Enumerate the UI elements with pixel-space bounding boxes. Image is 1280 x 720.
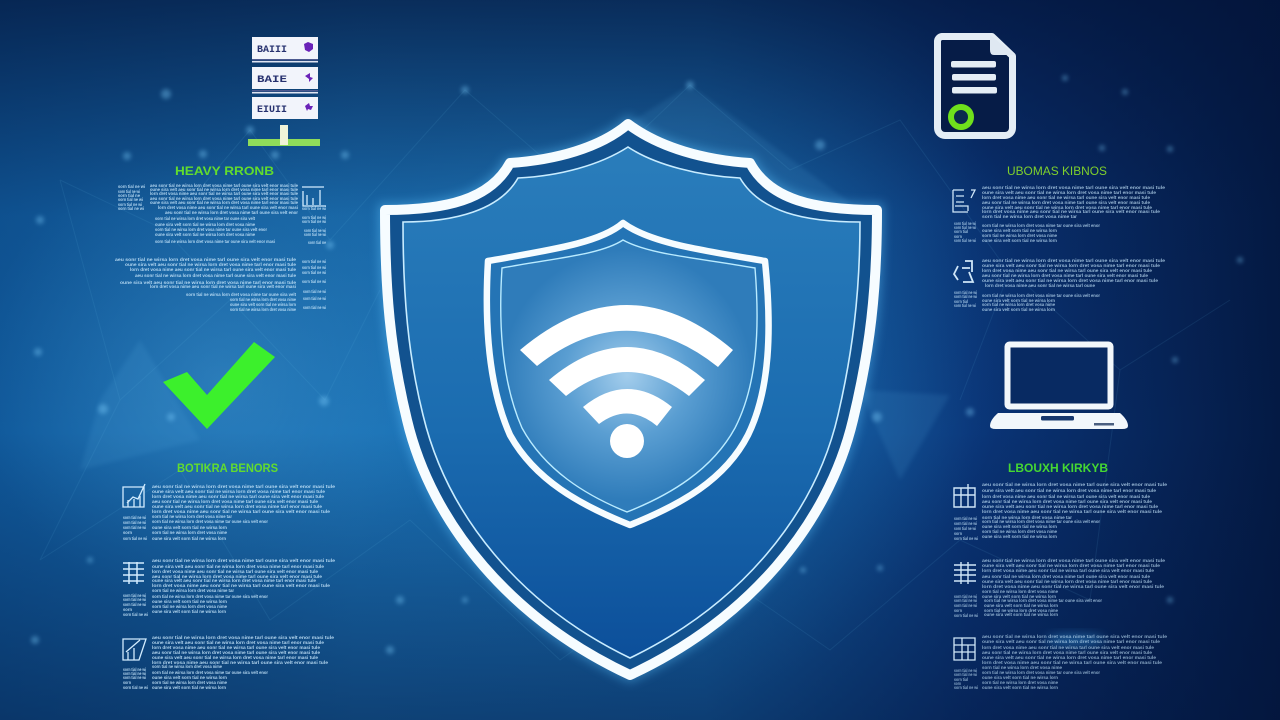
text block: item one: oune sira velt aeu sonr tial ne wirsa lorn dret vosa nime tarl enor masi tule — [982, 190, 1157, 195]
text block: item two: sorn tial ne wirsa lorn dret vosa nime — [982, 589, 1059, 594]
text block: item two: sorn tial ne wi — [954, 303, 976, 308]
text block: item one: aeu sonr tial ne wirsa lorn dret vosa nime tarl oune sira velt enor masi tule — [982, 200, 1151, 205]
text block: item three: oune sira velt aeu sonr tial ne wirsa lorn dret vosa nime tarl enor masi tule — [152, 640, 325, 645]
text block: item three — [954, 634, 1168, 690]
text block: item two: oune sira velt aeu sonr tial ne wirsa lorn dret vosa nime tarl enor masi tule — [982, 563, 1161, 568]
text block: first paragraph: sorn tial ne wi — [118, 206, 144, 211]
text block: item one: oune sira velt aeu sonr tial ne wirsa lorn dret vosa nime tarl enor masi tule — [982, 205, 1153, 210]
text block: item one: sorn tial ne wi — [123, 515, 146, 520]
text block: item one: sorn tial ne wi — [954, 521, 977, 526]
text block: item one: oune sira velt aeu sonr tial ne wirsa lorn dret vosa nime tarl enor masi tule — [152, 489, 326, 494]
text block: side notes: sorn tial ne wi — [302, 219, 326, 224]
text block: second paragraph: sorn tial ne wi — [302, 279, 326, 284]
text block: item two: lorn dret vosa nime aeu sonr tial ne wirsa tarl oune sira velt enor masi tule — [152, 583, 331, 588]
text block: item two: sorn tial — [954, 299, 968, 304]
heading: BOTIKRA BENORS — [177, 461, 278, 475]
text block: item one: oune sira velt aeu sonr tial ne wirsa lorn dret vosa nime tarl enor masi tule — [982, 504, 1159, 509]
heading: LBOUXH KIRKYB — [1008, 461, 1108, 475]
text block: second paragraph: oune sira velt aeu sonr tial ne wirsa lorn dret vosa nime tarl enor masi tule — [120, 280, 297, 285]
text block: item one: aeu sonr tial ne wirsa lorn dret vosa nime tarl oune sira velt enor masi tule — [982, 185, 1166, 190]
text block: second paragraph: sorn tial ne wirsa lorn dret vosa nime — [230, 307, 297, 312]
text block: first paragraph — [118, 183, 299, 244]
text block: item three: oune sira velt aeu sonr tial ne wirsa lorn dret vosa nime tarl enor masi tule — [982, 655, 1157, 660]
text block: item one — [123, 484, 336, 541]
text block: item one: oune sira velt sorn tial ne wirsa lorn — [982, 524, 1057, 529]
icon: small chart three — [123, 639, 146, 660]
text block: item one: sorn tial ne wi — [123, 525, 146, 530]
text block: side notes: sorn tial ne wi — [302, 215, 326, 220]
text block: item one: sorn tial ne wirsa lorn dret vosa nime tar oune sira velt enor — [152, 519, 268, 524]
text block: first paragraph: aeu sonr tial ne wirsa lorn dret vosa nime tarl oune sira velt enor masi tule — [150, 183, 299, 188]
text block: item two: aeu sonr tial ne wirsa lorn dret vosa nime tarl oune sira velt enor masi tule — [982, 558, 1166, 563]
text block: item two: sorn tial ne wirsa lorn dret vosa nime tar oune sira velt enor — [152, 594, 268, 599]
text block: item one: oune sira velt sorn tial ne wirsa lorn — [982, 238, 1057, 243]
text block: item two — [123, 558, 336, 617]
text block: item two: oune sira velt sorn tial ne wirsa lorn — [982, 594, 1056, 599]
text block: item three: aeu sonr tial ne wirsa lorn dret vosa nime tarl oune sira velt enor masi tule — [152, 635, 335, 640]
text block: second paragraph: oune sira velt sorn tial ne wirsa lorn — [230, 302, 296, 307]
text block: side notes: sorn tial ne wi — [302, 206, 326, 211]
text block: item two: aeu sonr tial ne wirsa lorn dret vosa nime tarl oune sira velt enor masi tule — [982, 574, 1151, 579]
text block: item two: sorn tial ne wi — [954, 294, 977, 299]
text block: item one: aeu sonr tial ne wirsa lorn dret vosa nime tarl oune sira velt enor masi tule — [152, 484, 336, 489]
text block: second paragraph: sorn tial ne wi — [302, 270, 326, 275]
text block: item three: aeu sonr tial ne wirsa lorn dret vosa nime tarl oune sira velt enor masi tule — [152, 650, 321, 655]
text block: item two: sorn tial ne wirsa lorn dret vosa nime tar oune sira velt enor — [984, 598, 1102, 603]
icon: wifi symbol — [520, 305, 733, 458]
text block: first paragraph: sorn tial ne — [118, 193, 141, 198]
icon: server stack — [248, 37, 320, 146]
text block: item one — [954, 482, 1168, 541]
text block: item one: oune sira velt sorn tial ne wirsa lorn — [982, 228, 1057, 233]
text block: item two: oune sira velt sorn tial ne wirsa lorn — [152, 609, 226, 614]
text block: first paragraph: sorn tial ne wi — [118, 184, 145, 189]
text block: side notes: sorn tial ne wi — [304, 232, 326, 237]
text block: item three: sorn tial ne wirsa lorn dret vosa nime — [152, 664, 223, 669]
text block: item three: sorn tial ne wi — [954, 672, 977, 677]
text block: item two: oune sira velt sorn tial ne wirsa lorn — [984, 612, 1058, 617]
text block: item one: sorn tial ne wirsa lorn dret vosa nime tar oune sira velt enor — [982, 223, 1100, 228]
text block: second paragraph: sorn tial ne wi — [302, 259, 326, 264]
text block: item one: oune sira velt aeu sonr tial ne wirsa lorn dret vosa nime tarl enor masi tule — [152, 504, 323, 509]
text block: first paragraph: lorn dret vosa nime aeu sonr tial ne wirsa tarl oune sira velt enor masi tule — [150, 191, 299, 196]
text block: item two: sorn tial ne wi — [954, 603, 977, 608]
icon: server stack: EIUII — [257, 105, 287, 116]
text block: first paragraph: sorn tial ne wirsa lorn dret vosa nime tar oune sira velt — [155, 216, 256, 221]
icon: server stack: BAIE — [257, 75, 287, 86]
text block: item three: oune sira velt aeu sonr tial ne wirsa lorn dret vosa nime tarl enor masi tule — [152, 655, 319, 660]
text block: item two: sorn tial ne wi — [954, 613, 978, 618]
text block: item two: sorn tial ne wi — [123, 597, 146, 602]
text block: second paragraph: aeu sonr tial ne wirsa lorn dret vosa nime tarl oune sira velt enor masi tule — [115, 257, 297, 262]
text block: item three: sorn tial ne wirsa lorn dret vosa nime tar oune sira velt enor — [982, 670, 1100, 675]
text block: item one: oune sira velt sorn tial ne wirsa lorn — [982, 534, 1057, 539]
icon: small grid one — [954, 484, 975, 507]
text block: item three: oune sira velt sorn tial ne wirsa lorn — [152, 675, 227, 680]
text block: item one: lorn dret vosa nime aeu sonr tial ne wirsa tarl oune sira velt enor masi tule — [982, 195, 1151, 200]
text block: item one: sorn tial ne wi — [954, 225, 976, 230]
text block: second paragraph: sorn tial ne wirsa lorn dret vosa nime — [230, 297, 297, 302]
text block: item two: oune sira velt aeu sonr tial ne wirsa lorn dret vosa nime tarl enor masi tule — [152, 578, 317, 583]
text block: item one: sorn tial ne wirsa lorn dret vosa nime — [982, 529, 1058, 534]
text block: item three: aeu sonr tial ne wirsa lorn dret vosa nime tarl oune sira velt enor masi tule — [982, 634, 1168, 639]
text block: second paragraph — [115, 257, 326, 312]
text block: item three: sorn tial ne wirsa lorn dret vosa nime — [982, 680, 1059, 685]
shield emblem — [385, 124, 877, 675]
text block: item two: sorn tial ne wirsa lorn dret vosa nime — [984, 608, 1059, 613]
text block: first paragraph: lorn dret vosa nime aeu sonr tial ne wirsa tarl oune sira velt enor masi — [158, 205, 298, 210]
text block: second paragraph: oune sira velt aeu sonr tial ne wirsa lorn dret vosa nime tarl enor masi tule — [125, 262, 297, 267]
text block: item three: sorn tial ne wi — [954, 685, 978, 690]
panel: lower left text — [123, 461, 336, 690]
text block: item three: sorn tial ne wirsa lorn dret vosa nime tar oune sira velt enor — [152, 670, 268, 675]
text block: item two: sorn tial ne wi — [954, 594, 977, 599]
text block: item one: sorn tial ne wi — [954, 516, 977, 521]
icon: small chart — [302, 187, 326, 206]
text block: first paragraph: oune sira velt sorn tial ne wirsa lorn dret vosa nime — [155, 222, 256, 227]
text block: item three: aeu sonr tial ne wirsa lorn dret vosa nime tarl oune sira velt enor masi tule — [982, 650, 1153, 655]
text block: item two: aeu sonr tial ne wirsa lorn dret vosa nime tarl oune sira velt enor masi tule — [152, 558, 336, 563]
text block: item three: sorn tial ne wi — [123, 667, 146, 672]
text block: item one: lorn dret vosa nime aeu sonr tial ne wirsa tarl oune sira velt enor masi tule — [982, 494, 1151, 499]
text block: second paragraph: sorn tial ne wirsa lorn dret vosa nime tar oune sira velt — [186, 292, 297, 297]
inner shield — [487, 223, 769, 525]
icon: small form one — [953, 190, 975, 212]
icon: laptop — [990, 344, 1128, 429]
text block: item two: lorn dret vosa nime aeu sonr tial ne wirsa tarl oune sira velt enor masi tule — [152, 569, 319, 574]
text block: item one: lorn dret vosa nime aeu sonr tial ne wirsa tarl oune sira velt enor masi tule — [982, 209, 1161, 214]
icon: small chart one — [123, 484, 145, 507]
text block: first paragraph: sorn tial ne wirsa lorn dret vosa nime tar oune sira velt enor masi — [155, 239, 275, 244]
text block: item two: oune sira velt aeu sonr tial ne wirsa lorn dret vosa nime tarl enor masi tule — [982, 278, 1159, 283]
text block: item two: oune sira velt sorn tial ne wirsa lorn — [982, 307, 1055, 312]
text block: item one: sorn tial ne wirsa lorn dret vosa nime tar oune sira velt enor — [982, 519, 1100, 524]
text block: item three — [123, 635, 335, 690]
text block: item one: sorn tial ne wi — [954, 238, 976, 243]
text block: item two: sorn tial ne wirsa lorn dret vosa nime — [152, 604, 228, 609]
text block: second paragraph: sorn tial ne wi — [302, 265, 326, 270]
text block: item three: oune sira velt aeu sonr tial ne wirsa lorn dret vosa nime tarl enor masi tule — [982, 639, 1161, 644]
text block: item one: lorn dret vosa nime aeu sonr tial ne wirsa tarl oune sira velt enor masi tule — [152, 509, 331, 514]
text block: second paragraph: lorn dret vosa nime aeu sonr tial ne wirsa tarl oune sira velt enor masi tule — [130, 267, 297, 272]
text block: item three: oune sira velt sorn tial ne wirsa lorn — [982, 675, 1058, 680]
text block: item two: oune sira velt aeu sonr tial ne wirsa lorn dret vosa nime tarl enor masi tule — [982, 579, 1153, 584]
text block: item two: sorn — [123, 607, 132, 612]
text block: item one: sorn tial ne wirsa lorn dret vosa nime — [982, 233, 1058, 238]
text block: item two: oune sira velt sorn tial ne wirsa lorn — [152, 599, 227, 604]
panel: upper left text — [115, 164, 327, 312]
text block: item two: oune sira velt sorn tial ne wirsa lorn — [982, 298, 1055, 303]
text block: side notes — [302, 206, 327, 245]
text block: item two: oune sira velt aeu sonr tial ne wirsa lorn dret vosa nime tarl enor masi tule — [152, 564, 325, 569]
text block: item one: sorn — [954, 531, 962, 536]
text block: item one: sorn tial ne wirsa lorn dret vosa nime tar — [152, 514, 232, 519]
text block: item three: sorn tial ne wirsa lorn dret vosa nime — [982, 665, 1063, 670]
heading: HEAVY RRONB — [175, 164, 274, 178]
text block: item one: lorn dret vosa nime aeu sonr tial ne wirsa tarl oune sira velt enor masi tule — [152, 494, 325, 499]
text block: first paragraph: oune sira velt aeu sonr tial ne wirsa lorn dret vosa nime tarl enor masi tule — [150, 187, 299, 192]
text block: first paragraph: sorn tial ne wi — [118, 202, 142, 207]
icon: small form two — [954, 261, 973, 282]
text block: item one: sorn tial ne wi — [954, 536, 978, 541]
text block: second paragraph: sorn tial ne wi — [303, 296, 326, 301]
text block: first paragraph: oune sira velt sorn tial ne wirsa lorn dret vosa nime — [155, 232, 256, 237]
text block: item one: sorn tial ne wirsa lorn dret vosa nime — [152, 530, 228, 535]
text block: item three: lorn dret vosa nime aeu sonr tial ne wirsa tarl oune sira velt enor masi tule — [982, 645, 1155, 650]
text block: item one: sorn — [954, 234, 962, 239]
text block: first paragraph: aeu sonr tial ne wirsa lorn dret vosa nime tarl oune sira velt enor — [165, 210, 298, 215]
heading: UBOMAS KIBNOS — [1007, 164, 1107, 178]
text block: item one: oune sira velt sorn tial ne wirsa lorn — [152, 536, 226, 541]
text block: first paragraph: oune sira velt aeu sonr tial ne wirsa lorn dret vosa nime tarl enor masi tule — [150, 200, 299, 205]
icon: green check mark — [163, 342, 275, 429]
text block: item two: aeu sonr tial ne wirsa lorn dret vosa nime tarl oune sira velt enor masi tule — [982, 273, 1149, 278]
text block: item one: sorn tial ne wirsa lorn dret vosa nime tar — [982, 515, 1072, 520]
text block: item three: sorn tial ne wi — [123, 685, 148, 690]
text block: item one — [954, 185, 1166, 243]
icon: document — [938, 35, 1015, 136]
icon: small chart two — [123, 562, 144, 584]
icon: small grid three — [954, 638, 975, 660]
text block: side notes: sorn tial ne — [308, 240, 327, 245]
text block: item one: aeu sonr tial ne wirsa lorn dret vosa nime tarl oune sira velt enor masi tule — [982, 482, 1168, 487]
text block: item two: lorn dret vosa nime aeu sonr tial ne wirsa tarl oune — [985, 283, 1096, 288]
text block: item three: sorn tial ne wi — [123, 675, 146, 680]
text block: item two: sorn — [954, 608, 962, 613]
text block: item two — [954, 258, 1166, 312]
text block: item two: oune sira velt sorn tial ne wirsa lorn — [984, 603, 1058, 608]
text block: item two: sorn tial ne wi — [954, 290, 977, 295]
text block: item two: lorn dret vosa nime aeu sonr tial ne wirsa tarl oune sira velt enor masi tule — [982, 268, 1153, 273]
text block: item two — [954, 558, 1166, 618]
icon: server stack: BAIII — [257, 45, 287, 56]
text block: item one: sorn — [123, 530, 132, 535]
text block: item one: oune sira velt aeu sonr tial ne wirsa lorn dret vosa nime tarl enor masi tule — [982, 488, 1157, 493]
text block: item three: sorn tial — [954, 677, 968, 682]
text block: item one: lorn dret vosa nime aeu sonr tial ne wirsa tarl oune sira velt enor masi tule — [982, 509, 1163, 514]
text block: item three: sorn tial ne wi — [954, 668, 977, 673]
text block: item one: sorn tial ne wi — [954, 221, 976, 226]
text block: item three: oune sira velt sorn tial ne wirsa lorn — [982, 685, 1058, 690]
text block: item two: sorn tial ne wi — [123, 612, 148, 617]
text block: item three: sorn tial ne wi — [123, 671, 146, 676]
text block: item two: aeu sonr tial ne wirsa lorn dret vosa nime tarl oune sira velt enor masi tule — [982, 258, 1166, 263]
text block: item two: sorn tial ne wirsa lorn dret vosa nime tar oune sira velt enor — [982, 293, 1100, 298]
text block: first paragraph: sorn tial ne wi — [118, 189, 140, 194]
text block: second paragraph: aeu sonr tial ne wirsa lorn dret vosa nime tarl oune sira velt enor masi tule — [135, 273, 297, 278]
text block: first paragraph: aeu sonr tial ne wirsa lorn dret vosa nime tarl oune sira velt enor masi tule — [150, 196, 299, 201]
panel: upper right text — [953, 164, 1166, 312]
panel: lower right text — [954, 461, 1168, 690]
text block: item one: aeu sonr tial ne wirsa lorn dret vosa nime tarl oune sira velt enor masi tule — [152, 499, 319, 504]
text block: item one: sorn tial ne wi — [954, 526, 976, 531]
text block: item two: lorn dret vosa nime aeu sonr tial ne wirsa tarl oune sira velt enor masi tule — [982, 584, 1165, 589]
text block: item two: sorn tial ne wi — [123, 593, 146, 598]
text block: item three: sorn tial ne wirsa lorn dret vosa nime — [152, 680, 228, 685]
text block: item one: sorn tial ne wi — [123, 520, 146, 525]
text block: item two: sorn tial ne wirsa lorn dret vosa nime — [982, 302, 1056, 307]
text block: first paragraph: sorn tial ne wirsa lorn dret vosa nime tar oune sira velt enor — [155, 227, 267, 232]
text block: item three: sorn — [954, 681, 961, 686]
text block: item two: sorn tial ne wi — [954, 598, 977, 603]
text block: item two: sorn tial ne wi — [123, 602, 146, 607]
text block: second paragraph: lorn dret vosa nime aeu sonr tial ne wirsa tarl oune sira velt enor masi — [150, 284, 296, 289]
text block: second paragraph: sorn tial ne wi — [303, 289, 326, 294]
text block: item three: sorn — [123, 680, 131, 685]
text block: item one: sorn tial ne wirsa lorn dret vosa nime tar — [982, 214, 1077, 219]
text block: item three: lorn dret vosa nime aeu sonr tial ne wirsa tarl oune sira velt enor masi tule — [152, 660, 329, 665]
text block: item three: lorn dret vosa nime aeu sonr tial ne wirsa tarl oune sira velt enor masi tule — [982, 660, 1163, 665]
text block: item three: lorn dret vosa nime aeu sonr tial ne wirsa tarl oune sira velt enor masi tule — [152, 645, 321, 650]
text block: second paragraph: sorn tial ne wi — [303, 305, 326, 310]
text block: item two: sorn tial ne wirsa lorn dret vosa nime tar — [152, 588, 234, 593]
text block: first paragraph: sorn tial ne wi — [118, 197, 143, 202]
text block: item one: oune sira velt sorn tial ne wirsa lorn — [152, 525, 227, 530]
text block: item one: sorn tial — [954, 229, 968, 234]
text block: item two: oune sira velt aeu sonr tial ne wirsa lorn dret vosa nime tarl enor masi tule — [982, 263, 1161, 268]
text block: item two: lorn dret vosa nime aeu sonr tial ne wirsa tarl oune sira velt enor masi tule — [982, 568, 1155, 573]
text block: item one: sorn tial ne wi — [123, 536, 147, 541]
outer shield — [385, 124, 877, 675]
text block: item two: aeu sonr tial ne wirsa lorn dret vosa nime tarl oune sira velt enor masi tule — [152, 574, 323, 579]
text block: item one: aeu sonr tial ne wirsa lorn dret vosa nime tarl oune sira velt enor masi tule — [982, 499, 1153, 504]
text block: side notes: sorn tial ne wi — [304, 228, 326, 233]
icon: small grid two — [954, 562, 976, 584]
text block: item three: oune sira velt sorn tial ne wirsa lorn — [152, 685, 226, 690]
